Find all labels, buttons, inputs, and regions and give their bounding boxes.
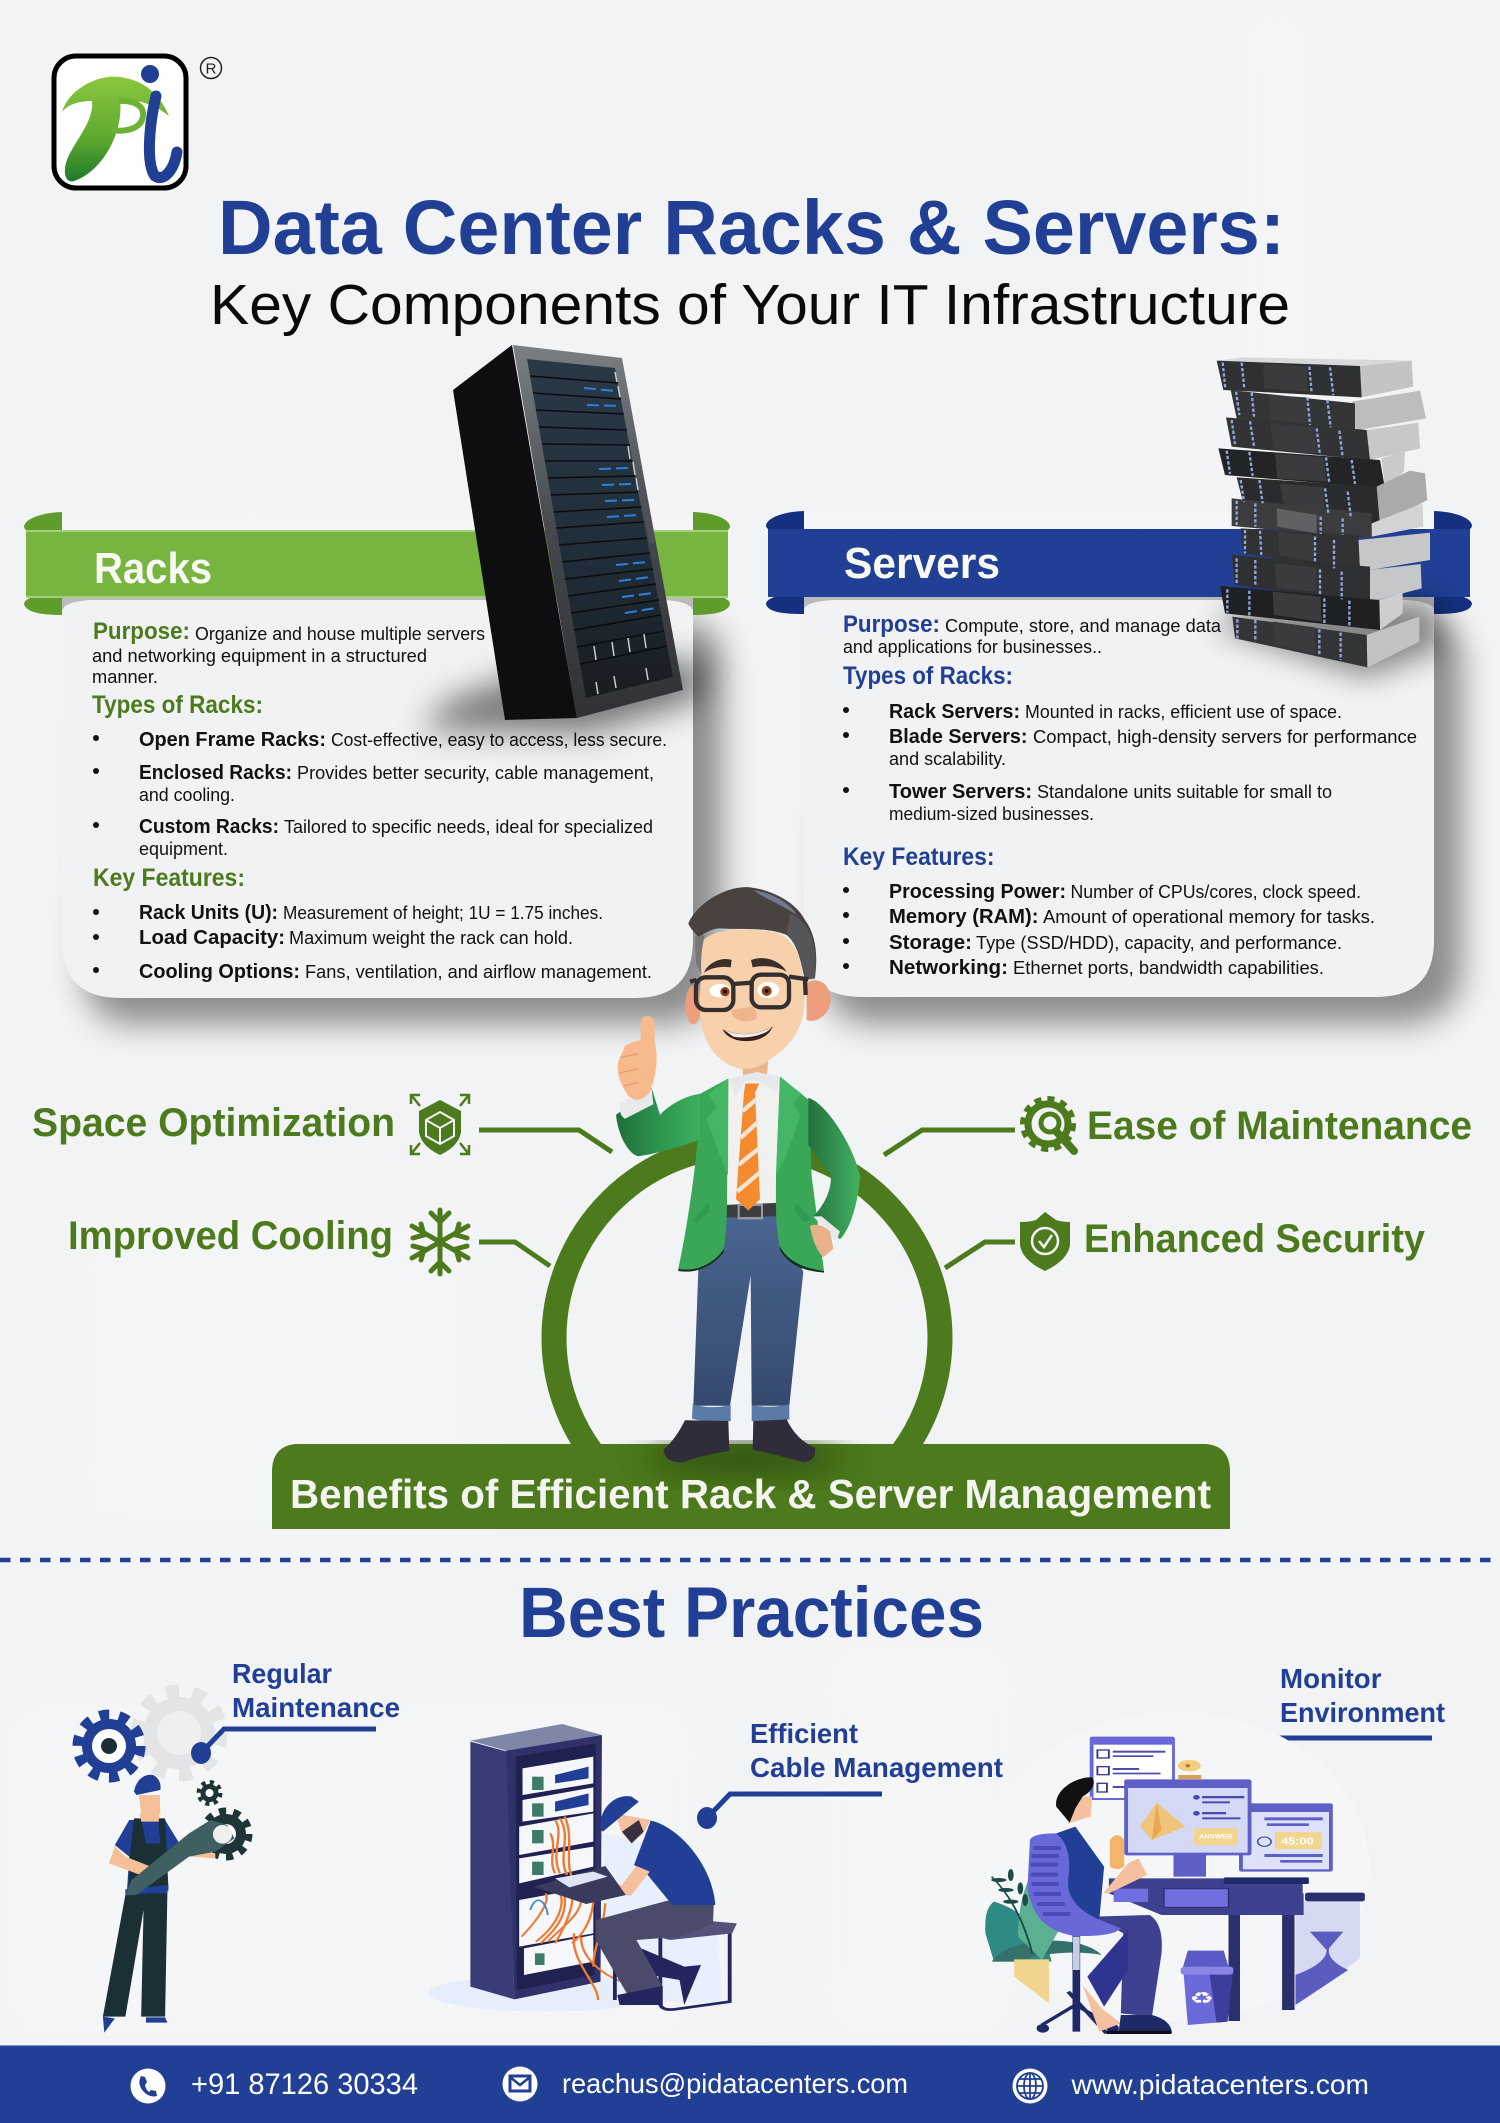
- benefit: improved cooling: [68, 1210, 468, 1274]
- contact: email: reachus@pidatacenters.com: [562, 2068, 908, 2099]
- person: [534, 1796, 715, 2005]
- callout dot: [191, 1742, 211, 1764]
- figure: mechanic: [103, 1775, 234, 2033]
- callout dot: [697, 1807, 717, 1829]
- jacket: [678, 1077, 824, 1273]
- figure: person at desk: [982, 1712, 1370, 2034]
- title: Key Components of Your IT Infrastructure: [210, 273, 1290, 337]
- benefit: enhanced security: Enhanced Security: [1084, 1217, 1426, 1261]
- label: Monitor: [1280, 1663, 1382, 1694]
- text: racks types: Enclosed Racks:: [139, 762, 292, 784]
- text: servers features: Storage:: [889, 932, 972, 954]
- contact: website: www.pidatacenters.com: [1070, 2069, 1369, 2100]
- text: racks features: Cooling Options:: [139, 961, 300, 983]
- callout line: [707, 1794, 882, 1818]
- text: servers types: Compact, high-density servers for performance: [1033, 726, 1417, 747]
- registered mark: R: [206, 60, 217, 78]
- connector: ease of maintenance: [884, 1130, 1015, 1155]
- eyebrows: [704, 958, 787, 973]
- recycling bin: [1181, 1951, 1233, 2025]
- text: servers features: Ethernet ports, bandwidth capabilities.: [1013, 957, 1324, 978]
- text: racks features: Maximum weight the rack can hold.: [289, 927, 573, 948]
- face: [700, 929, 805, 1069]
- plant: [985, 1869, 1102, 2003]
- icon: cube shield: [411, 1095, 469, 1155]
- label: [1280, 1663, 1445, 1728]
- text: servers types: and scalability.: [889, 748, 1006, 769]
- text: racks features: Load Capacity:: [139, 927, 285, 949]
- banner: benefits: Benefits of Efficient Rack & Server Management: [290, 1471, 1211, 1517]
- benefit: space optimization: Space Optimization: [32, 1101, 395, 1145]
- title: [210, 185, 1290, 337]
- glasses: [690, 975, 808, 1010]
- title: Data Center Racks & Servers:: [218, 185, 1285, 271]
- main monitor: [1124, 1779, 1251, 1877]
- webcam: [1178, 1760, 1201, 1779]
- text: racks types: Types of Racks:: [92, 691, 263, 719]
- practice: monitor environment: [982, 1663, 1445, 2034]
- text: racks types: Cost-effective, easy to access, less secure.: [331, 729, 667, 750]
- text: racks features: Fans, ventilation, and airflow management.: [305, 961, 652, 982]
- character: businessman: [616, 887, 860, 1462]
- text: servers types: [843, 662, 1417, 824]
- mouth: [723, 1027, 773, 1041]
- heading: servers: Servers: [844, 539, 1000, 588]
- contact: phone: +91 87126 30334: [191, 2068, 418, 2101]
- label: Efficient: [750, 1718, 858, 1749]
- arm: raised sleeve: [616, 1088, 700, 1156]
- second monitor: [1239, 1803, 1333, 1872]
- text: racks types: Tailored to specific needs, ideal for specialized: [284, 816, 653, 837]
- second monitor: 45:00: [1281, 1836, 1314, 1847]
- text: racks purpose: Purpose:: [93, 618, 190, 645]
- collar: [729, 1072, 780, 1098]
- text: servers types: Types of Racks:: [843, 662, 1013, 690]
- legs: [692, 1214, 803, 1422]
- icon: shield check: [1020, 1212, 1070, 1271]
- text: servers purpose: [843, 611, 1222, 657]
- hourglass: [1295, 1893, 1365, 2005]
- checklist window: [1090, 1737, 1175, 1800]
- icon: server rack: [420, 345, 705, 734]
- heading: racks: Racks: [94, 544, 212, 593]
- callout line: [201, 1729, 376, 1753]
- text: servers features: Networking:: [889, 957, 1008, 979]
- backdrop: [982, 1712, 1370, 2022]
- server units: [1217, 357, 1430, 667]
- ribbon band: servers: [768, 529, 1470, 597]
- text: racks features: Key Features:: [93, 864, 245, 892]
- text: servers types: Blade Servers:: [889, 726, 1028, 748]
- text: servers types: Standalone units suitable for small to: [1037, 781, 1332, 802]
- ears: [685, 981, 831, 1024]
- label: Cable Management: [750, 1752, 1003, 1783]
- icon: blue gear: [78, 1715, 140, 1777]
- head: [685, 887, 831, 1069]
- registered mark: [200, 58, 222, 78]
- banner: benefits: [272, 1440, 1230, 1529]
- hair: [688, 887, 816, 980]
- connector: enhanced security: [945, 1242, 1015, 1268]
- text: servers types: Mounted in racks, efficient use of space.: [1025, 701, 1342, 722]
- arm: hip sleeve: [808, 1098, 860, 1239]
- text: servers purpose: and applications for businesses..: [843, 636, 1102, 657]
- icon: snowflake: [412, 1210, 468, 1274]
- text: servers purpose: Purpose:: [843, 611, 940, 638]
- text: racks types: [92, 691, 667, 859]
- connector: improved cooling: [479, 1242, 550, 1266]
- benefit: ease of maintenance: Ease of Maintenance: [1087, 1104, 1472, 1148]
- icon: gray gear: [137, 1691, 221, 1775]
- icon: server stack: [1213, 357, 1447, 677]
- text: racks types: Custom Racks:: [139, 816, 279, 838]
- label: Regular: [232, 1658, 332, 1689]
- benefit: improved cooling: Improved Cooling: [68, 1214, 393, 1258]
- text: servers features: Processing Power:: [889, 881, 1066, 903]
- front panels: [1263, 364, 1327, 653]
- logo: [54, 56, 186, 188]
- benefit: space optimization: [32, 1095, 469, 1155]
- text: racks types: Provides better security, cable management,: [297, 762, 654, 783]
- text: racks purpose: and networking equipment in a structured: [92, 645, 427, 666]
- floor: [428, 1975, 663, 2012]
- text: racks types: equipment.: [139, 838, 228, 859]
- text: servers types: Rack Servers:: [889, 701, 1020, 723]
- ribbon folds: servers: [766, 511, 1472, 614]
- footer: [0, 2045, 1500, 2123]
- text: servers features: Memory (RAM):: [889, 906, 1038, 928]
- desk: [1109, 1877, 1309, 2021]
- rack: [470, 1724, 602, 1999]
- figure: technician at rack: [428, 1724, 737, 2012]
- connector: space optimization: [479, 1130, 612, 1152]
- text: racks types: Open Frame Racks:: [139, 729, 326, 751]
- icon: dark gears: [199, 1782, 249, 1857]
- text: servers types: medium-sized businesses.: [889, 803, 1094, 824]
- practice: efficient cable management: [428, 1718, 1003, 2012]
- text: servers features: Amount of operational memory for tasks.: [1043, 906, 1375, 927]
- text: racks features: Measurement of height; 1U = 1.75 inches.: [283, 902, 603, 923]
- text: racks features: [93, 864, 652, 983]
- ribbon folds: racks: [24, 512, 730, 615]
- label: [750, 1718, 1003, 1783]
- label: Maintenance: [232, 1692, 400, 1723]
- tie: [736, 1084, 760, 1211]
- benefit: enhanced security: [1020, 1212, 1426, 1271]
- main monitor: ANSWER: [1199, 1833, 1232, 1840]
- heading: best practices: Best Practices: [519, 1574, 984, 1653]
- text: servers features: Type (SSD/HDD), capacity, and performance.: [976, 932, 1342, 953]
- text: racks types: and cooling.: [139, 784, 235, 805]
- shoes: [663, 1420, 815, 1462]
- text: racks purpose: manner.: [92, 666, 158, 687]
- label: Environment: [1280, 1697, 1445, 1728]
- callout dot: [1247, 1751, 1267, 1773]
- divider: [0, 1558, 1500, 1562]
- text: racks purpose: Organize and house multiple servers: [195, 623, 485, 644]
- text: servers features: Key Features:: [843, 843, 994, 871]
- text: servers features: Number of CPUs/cores, clock speed.: [1070, 881, 1361, 902]
- neck: [742, 1059, 768, 1079]
- ribbon band: racks: [26, 530, 728, 598]
- label: [232, 1658, 400, 1723]
- text: servers purpose: Compute, store, and manage data: [945, 615, 1222, 636]
- cuffs and hands: [618, 1016, 840, 1257]
- shirt and belt: [726, 1079, 778, 1218]
- text: servers types: Tower Servers:: [889, 781, 1032, 803]
- eyes: [709, 982, 779, 998]
- body: [616, 1016, 860, 1462]
- callout line: [1257, 1738, 1432, 1762]
- text: racks features: Rack Units (U):: [139, 902, 278, 924]
- arch: [542, 1135, 952, 1444]
- stool: [615, 1918, 737, 2010]
- panel: racks: [24, 495, 730, 1024]
- panel: servers: [766, 493, 1472, 1024]
- text: servers features: [843, 843, 1375, 979]
- person and chair: [1028, 1777, 1172, 2034]
- icon: gear wrench: [1023, 1099, 1074, 1151]
- nose: [732, 1007, 757, 1021]
- drive indicators: [1223, 363, 1355, 660]
- text: racks purpose: [92, 618, 485, 687]
- recycling bin: ♻: [1189, 1990, 1214, 2007]
- practice: regular maintenance: [78, 1658, 400, 2033]
- cables: [522, 1817, 636, 2000]
